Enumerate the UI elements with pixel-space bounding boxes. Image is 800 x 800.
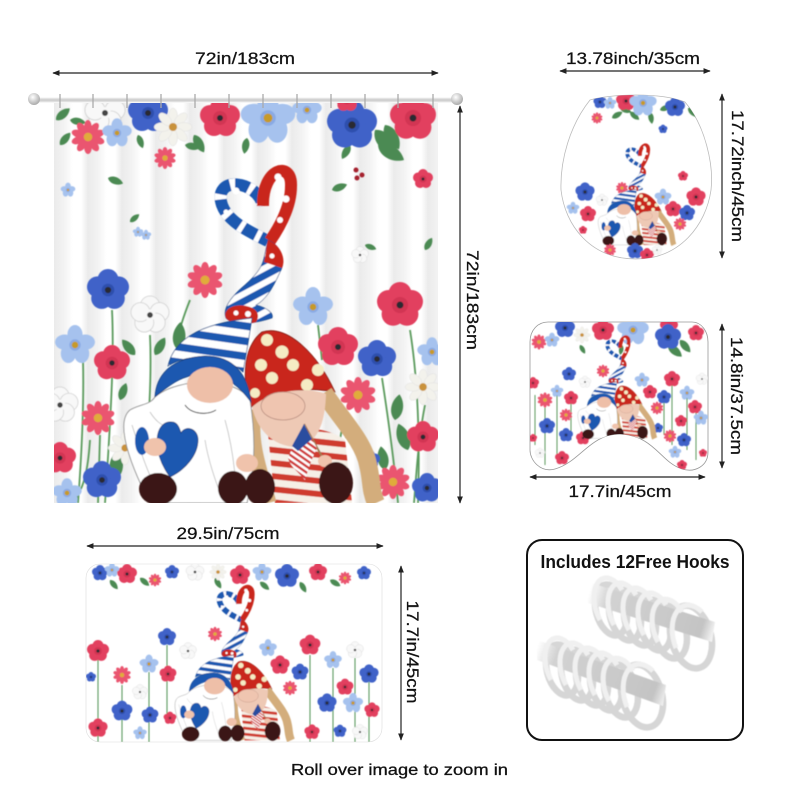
panel: free hooks <box>527 540 743 740</box>
dimension: lid width: 13.78inch/35cm <box>566 49 700 68</box>
panel: contour rug <box>527 314 708 470</box>
panel: bath mat <box>86 563 382 742</box>
panel: toilet lid cover <box>561 89 712 261</box>
curtain gnomes <box>124 171 376 505</box>
dimension: contour rug width: 17.7in/45cm <box>568 482 672 501</box>
contour rug gnomes <box>578 337 655 439</box>
curtain rod with hooks <box>28 93 463 108</box>
dimension: bath mat width: 29.5in/75cm <box>176 524 280 543</box>
dimension: bath mat height: 17.7in/45cm <box>403 600 422 704</box>
curtain leaves <box>53 105 435 481</box>
bath mat gnomes <box>175 588 291 741</box>
curtain stems <box>72 300 425 503</box>
caption: Roll over image to zoom in <box>291 762 508 779</box>
dimension: curtain height: 72in/183cm <box>463 250 482 350</box>
dimension: curtain width: 72in/183cm <box>195 49 295 68</box>
dimension: lid height: 17.72inch/45cm <box>728 110 747 242</box>
bath mat flowers <box>86 563 380 742</box>
contour rug flowers <box>527 314 708 470</box>
lid gnomes <box>598 145 674 246</box>
panel: shower curtain <box>42 88 447 506</box>
hooks heading: Includes 12Free Hooks <box>540 552 730 572</box>
dimension: contour rug height: 14.8in/37.5cm <box>727 337 746 455</box>
hooks on rod: upper <box>588 578 719 673</box>
hooks on rod: lower <box>537 638 670 732</box>
curtain flowers <box>42 88 447 506</box>
lid flowers <box>567 89 706 234</box>
lid bottom flowers <box>604 243 662 261</box>
